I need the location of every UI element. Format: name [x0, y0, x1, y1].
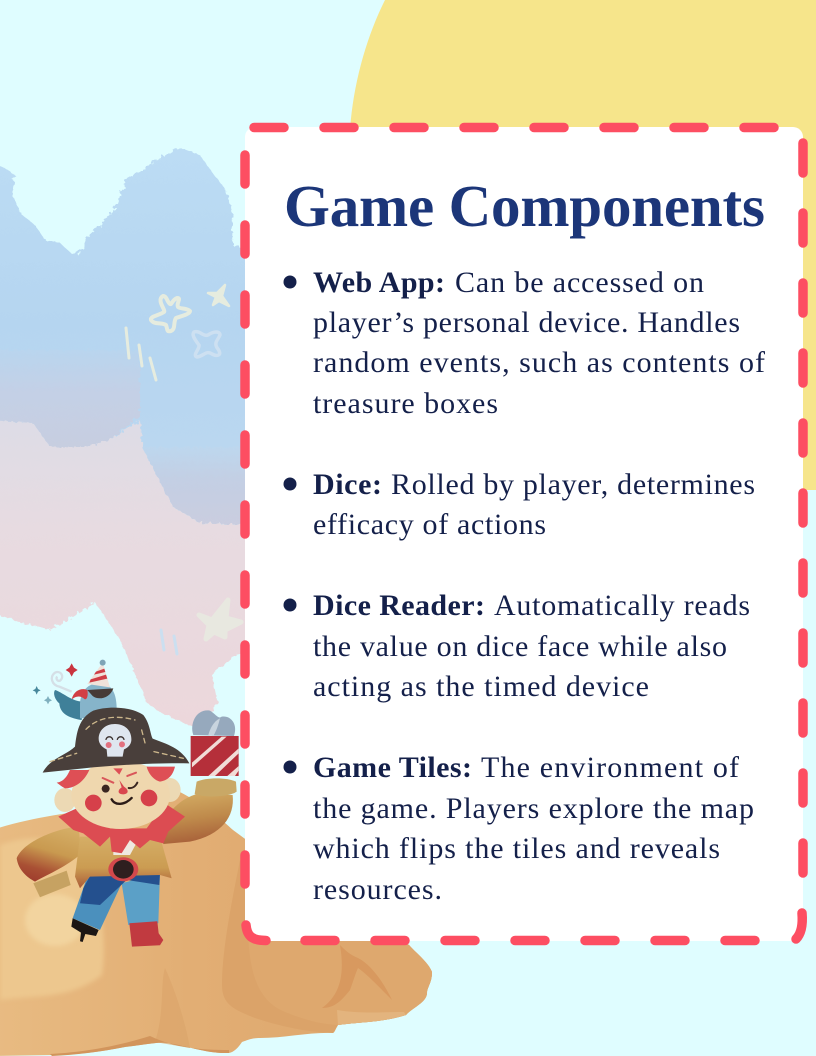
scarf — [58, 803, 185, 853]
party hat — [87, 663, 110, 687]
sand pale spot — [25, 894, 85, 946]
title: Game Components — [284, 173, 765, 239]
shirt — [113, 837, 140, 855]
game tiles text: resources. — [313, 873, 442, 906]
dice reader text: Dice Reader: — [313, 589, 485, 622]
face — [71, 761, 170, 829]
dice reader text: the value on dice face while also — [313, 630, 727, 663]
boot — [129, 921, 163, 947]
bullet — [284, 478, 296, 490]
sparkle teal small — [44, 696, 52, 704]
doodle stars — [126, 285, 241, 654]
right arm and hand — [163, 778, 237, 844]
motion ticks — [126, 328, 156, 380]
left arm and hand — [17, 827, 82, 897]
item: game tiles — [284, 751, 754, 906]
star outline — [151, 296, 190, 331]
sand mound — [0, 792, 432, 1056]
game tiles text: which flips the tiles and reveals — [313, 832, 720, 865]
yellow circle — [350, 0, 816, 490]
nose — [119, 780, 128, 794]
gift box — [191, 710, 239, 776]
white card — [245, 127, 803, 941]
watercolor cloud — [0, 147, 260, 727]
pirate hat — [43, 708, 189, 773]
solid star — [208, 285, 229, 306]
hand — [33, 871, 71, 897]
belt buckle — [108, 857, 138, 881]
skull cheeks — [106, 742, 112, 748]
top dashes — [254, 123, 774, 132]
rear leg jeans — [73, 877, 123, 930]
faint star outline — [193, 332, 220, 357]
bottom right corner — [796, 913, 802, 939]
mouth — [112, 798, 132, 804]
hair tuft — [113, 768, 123, 775]
sweater — [75, 837, 172, 888]
hat stitching — [50, 717, 183, 762]
eye open — [102, 785, 110, 793]
arm — [163, 794, 233, 844]
beak — [72, 689, 88, 699]
pink cloud blob — [0, 420, 260, 727]
ribbon bow — [192, 710, 235, 736]
mauve wash left — [0, 350, 140, 447]
pale blue ticks — [161, 630, 177, 654]
dice reader text: acting as the timed device — [313, 670, 649, 703]
front leg jeans — [122, 873, 160, 925]
dice reader text: Automatically reads — [494, 589, 750, 622]
peg leg — [71, 918, 99, 942]
parrot wing — [54, 690, 83, 720]
ears — [54, 788, 76, 812]
sand mid fold — [248, 935, 432, 1025]
mauve wash right — [142, 447, 260, 525]
head — [54, 761, 181, 829]
web app text: random events, such as contents of — [313, 346, 765, 379]
denim shade — [80, 873, 160, 905]
web app text: Web App: — [313, 266, 445, 299]
arm — [17, 827, 82, 882]
box — [191, 736, 239, 776]
eye wink — [129, 783, 137, 788]
parrot — [54, 660, 117, 720]
web app text: Can be accessed on — [455, 266, 704, 299]
game tiles text: the game. Players explore the map — [313, 792, 754, 825]
sand rock crease — [322, 945, 392, 1008]
dice text: Dice: — [313, 468, 382, 501]
skull eyes — [106, 737, 124, 739]
sand base — [0, 792, 432, 1056]
hair right — [147, 767, 175, 782]
brows — [103, 773, 136, 783]
right dashes — [798, 143, 808, 873]
sand pale ledge — [337, 1010, 406, 1025]
horn swirl — [52, 672, 72, 692]
bottom dashes — [305, 936, 755, 945]
web app text: player’s personal device. Handles — [313, 306, 740, 339]
left dashes — [240, 155, 250, 884]
hand — [195, 778, 237, 796]
sand shadow strip — [50, 1036, 229, 1056]
parrot body — [80, 683, 117, 718]
web app text: treasure boxes — [313, 387, 498, 420]
sand ridge — [155, 968, 190, 1048]
bottom star — [199, 600, 241, 639]
sparkle red — [66, 663, 78, 677]
skull — [99, 724, 131, 757]
sparkle teal — [33, 686, 41, 695]
hair left — [57, 770, 89, 788]
game tiles text: The environment of — [481, 751, 739, 784]
game tiles text: Game Tiles: — [313, 751, 472, 784]
sand dark fold — [222, 860, 432, 1033]
sand light patch — [0, 838, 104, 1000]
bullet — [284, 760, 296, 774]
eye patch — [87, 688, 113, 698]
hat shape — [43, 708, 189, 773]
item: dice reader — [284, 589, 750, 703]
party horn and sparkles — [33, 663, 78, 704]
cheeks — [85, 795, 102, 811]
legs — [71, 873, 163, 947]
dice text: Rolled by player, determines — [391, 468, 755, 501]
item: dice — [284, 468, 755, 541]
item: web app — [284, 266, 765, 420]
pirate character — [17, 660, 239, 947]
torso — [75, 837, 172, 888]
bullet — [284, 598, 296, 612]
blue cloud blob — [0, 147, 260, 500]
bottom left corner — [246, 925, 266, 940]
dashed red border — [245, 128, 803, 940]
dice text: efficacy of actions — [313, 508, 546, 541]
bullet — [284, 276, 296, 288]
